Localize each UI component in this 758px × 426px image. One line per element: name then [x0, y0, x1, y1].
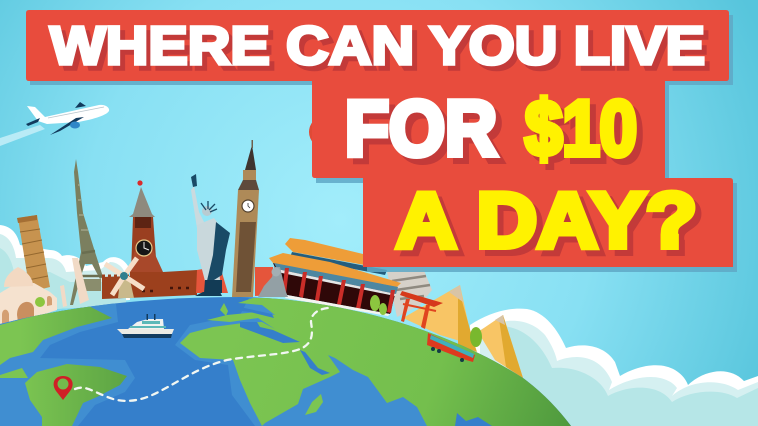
- landmark: Leaning Tower of Pisa: [17, 215, 50, 292]
- landmark: Buddha statue: [258, 267, 288, 297]
- landmark: pagoda: [387, 268, 432, 317]
- trees: [370, 295, 482, 347]
- heading line 2 price: $10: [525, 84, 637, 172]
- landmark: windmill: [105, 258, 144, 298]
- title banner: [26, 10, 733, 270]
- heading line 3 shadow: A DAY?: [402, 182, 703, 270]
- heading line 1: WHERE CAN YOU LIVE: [50, 16, 705, 76]
- Greenland detail: [220, 303, 228, 316]
- Central America: [0, 368, 28, 378]
- cloud: right background: [470, 309, 758, 426]
- red circle behind title: [309, 116, 341, 148]
- landmark: Eiffel Tower: [70, 159, 103, 305]
- heading line 3: A DAY?: [396, 176, 697, 264]
- landmark: Statue of Liberty: [191, 174, 230, 296]
- red wall behind statue: [196, 266, 273, 296]
- North America: [0, 303, 112, 365]
- landmark: torii gate: [400, 291, 443, 329]
- location pin: [54, 376, 73, 400]
- Mediterranean Sea: [240, 322, 300, 343]
- landmark: Chinese temple: [269, 238, 401, 316]
- airplane: [0, 102, 109, 146]
- heading line 2 shadow left: FOR: [351, 90, 503, 178]
- landmark: cream monuments: [60, 258, 89, 307]
- title banner shadow: [30, 15, 737, 272]
- ocean coastal halo: [0, 295, 580, 426]
- heading line 2 white part: FOR: [345, 84, 497, 172]
- southeast Asia sea: [455, 413, 492, 426]
- landmark: Big Ben: [232, 140, 259, 297]
- Red Sea: [300, 350, 330, 375]
- Black Sea: [242, 308, 274, 318]
- globe: [0, 295, 590, 426]
- cloud: left background: [0, 225, 130, 312]
- bus: [427, 333, 475, 362]
- heading line 2 shadow right: $10: [531, 90, 643, 178]
- Europe, Asia and Africa: [180, 298, 590, 426]
- South America: [25, 364, 127, 426]
- route dashed line: [75, 308, 328, 401]
- cruise ship: [117, 314, 174, 338]
- heading line 1 shadow: WHERE CAN YOU LIVE: [55, 21, 710, 81]
- Madagascar: [305, 394, 323, 415]
- landmark: Taj Mahal: [0, 267, 57, 332]
- landmark: pyramids: [403, 285, 523, 378]
- landmark: Kremlin wall and tower: [102, 180, 197, 299]
